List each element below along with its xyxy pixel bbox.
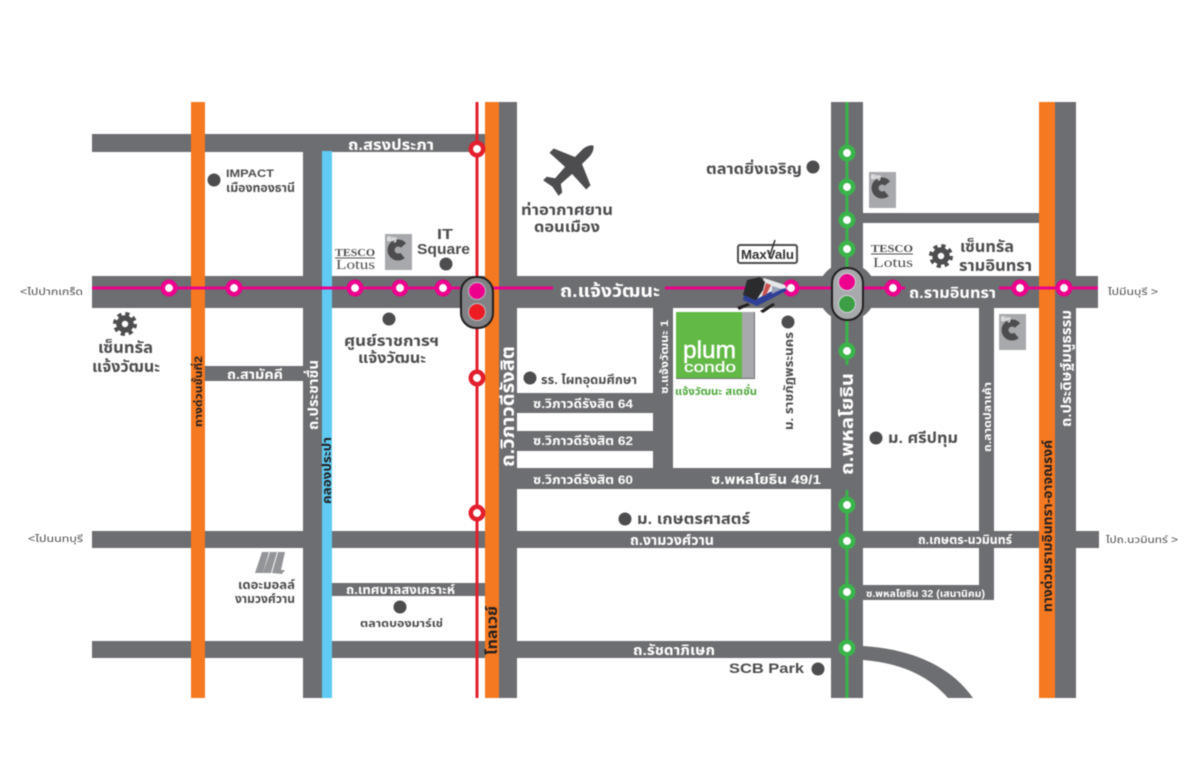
landmark labels: ตลาดบองมาร์เช่	[360, 617, 443, 630]
vertical road labels: ทางด่วนรามอินทรา-อาจณรงค์	[1040, 440, 1055, 612]
road labels: ซ.พหลโยธิน 49/1	[711, 472, 821, 487]
vertical road labels: ถ.ประชาชื่น	[303, 360, 321, 430]
landmark labels: ม. ราชภัฏพระนคร	[782, 332, 796, 430]
icon: BTS train	[737, 277, 787, 313]
vertical road labels: คลองประปา	[320, 437, 334, 504]
logo: Big C left	[385, 234, 412, 270]
landmark labels: งามวงศ์วาน	[235, 592, 295, 606]
vertical road labels: ถ.ประดิษฐ์มนูธรรม	[1058, 310, 1076, 427]
vertical road labels: ซ.แจ้งวัฒนะ 1	[658, 320, 671, 394]
logo: Plum Condo: แจ้งวัฒนะ สเตชั่น	[675, 383, 757, 398]
direction labels: ไปมีนบุรี >	[1107, 286, 1158, 298]
road labels: ถ.สามัคคี	[227, 367, 283, 382]
road labels: ถ.งามวงศ์วาน	[630, 532, 714, 548]
landmark labels: ตลาดยิ่งเจริญ	[706, 159, 802, 178]
road labels: ถ.เทศบาลสงเคราะห์	[346, 583, 455, 597]
landmark labels: SCB Park	[729, 660, 804, 676]
direction labels	[20, 285, 1178, 546]
vertical road labels: ถ.วิภาวดีรังสิต	[498, 346, 519, 467]
landmark labels: รามอินทรา	[959, 258, 1032, 275]
vertical road labels	[190, 310, 1076, 655]
direction labels: ไปถ.นวมินทร์ >	[1105, 534, 1178, 546]
landmark labels: ม. เกษตรศาสตร์	[637, 511, 750, 528]
landmark labels: แจ้งวัฒนะ	[92, 358, 160, 376]
icon: central right	[932, 246, 950, 266]
logo: MaxValu: MaxValu	[741, 247, 794, 262]
road labels: ถ.เกษตร-นวมินทร์	[918, 533, 1012, 547]
landmark labels: ท่าอากาศยาน	[521, 201, 613, 219]
canal	[322, 151, 332, 698]
road labels: ซ.วิภาวดีรังสิต 64	[533, 397, 633, 411]
landmark labels: ม. ศรีปทุม	[888, 430, 958, 447]
landmark labels: แจ้งวัฒนะ	[358, 349, 426, 367]
landmark labels: Square	[417, 241, 470, 258]
logo: Tesco Lotus left: TESCO	[335, 248, 375, 259]
logo: Big C top right: Big	[871, 175, 881, 181]
logo: Plum Condo: condo	[684, 359, 736, 376]
logo: Plum Condo	[675, 312, 757, 398]
logo: Tesco Lotus right	[871, 244, 913, 271]
logo: Plum Condo: plum	[683, 337, 736, 364]
expressway: left	[191, 102, 205, 698]
landmark labels: เมืองทองธานี	[226, 181, 295, 195]
pink stations	[163, 282, 1070, 294]
landmark labels: เดอะมอลล์	[238, 578, 295, 592]
green stations	[841, 147, 853, 654]
tollway	[485, 102, 499, 698]
logo: Big C lower right: Big	[1001, 317, 1011, 323]
road labels: ถ.สรงประภา	[348, 137, 434, 154]
vertical road labels: โทลเวย์	[484, 606, 501, 655]
vertical road labels: ทางด่วนขั้นที่2	[190, 356, 205, 427]
logo: Big C top right	[869, 172, 896, 208]
interchange: pink and green	[832, 268, 863, 320]
logo: Tesco Lotus left: Lotus	[336, 258, 375, 273]
road labels: ซ.วิภาวดีรังสิต 62	[533, 434, 633, 448]
red rail line	[476, 102, 478, 698]
expressway: right	[1039, 102, 1055, 698]
vertical road labels: ถ.ลาดปลาเค้า	[981, 382, 994, 452]
direction labels: <ไปนนทบุรี	[28, 533, 84, 545]
icon: central left	[116, 314, 134, 334]
pink rail line	[92, 286, 1098, 290]
landmark labels: รร. ไผทอุดมศึกษา	[541, 373, 637, 387]
logo: Tesco Lotus right: Lotus	[873, 256, 913, 271]
road labels: ซ.วิภาวดีรังสิต 60	[533, 473, 633, 487]
logo: Big C lower right	[999, 314, 1026, 350]
landmark labels	[92, 159, 1032, 676]
landmark labels: IT	[437, 226, 453, 243]
direction labels: <ไปปากเกร็ด	[20, 285, 83, 298]
landmark dots	[208, 160, 882, 676]
landmark labels: ดอนเมือง	[534, 219, 600, 236]
vertical road labels: ถ.พหลโยธิน	[837, 373, 857, 475]
logo: Big C left: Big	[387, 237, 397, 243]
logo: The Mall	[255, 552, 285, 574]
landmark labels: เซ็นทรัล	[98, 339, 153, 357]
landmark labels: เซ็นทรัล	[960, 238, 1014, 256]
green rail line	[846, 102, 848, 698]
landmark labels: IMPACT	[226, 168, 274, 180]
interchange: pink and red	[461, 277, 493, 328]
icon: airplane	[533, 127, 612, 206]
road labels: ถ.แจ้งวัฒนะ	[560, 281, 660, 301]
road network	[92, 102, 1099, 698]
landmark labels: ศูนย์ราชการฯ	[344, 333, 439, 351]
red stations	[471, 143, 483, 519]
logo: MaxValu	[738, 240, 797, 263]
road labels: ถ.รัชดาภิเษก	[633, 642, 715, 658]
road labels	[227, 137, 1012, 658]
road labels: ซ.พหลโยธิน 32 (เสนานิคม)	[866, 588, 985, 600]
logo: Tesco Lotus left	[335, 248, 375, 273]
logo: Tesco Lotus right: TESCO	[871, 244, 913, 255]
road labels: ถ.รามอินทรา	[909, 285, 996, 302]
